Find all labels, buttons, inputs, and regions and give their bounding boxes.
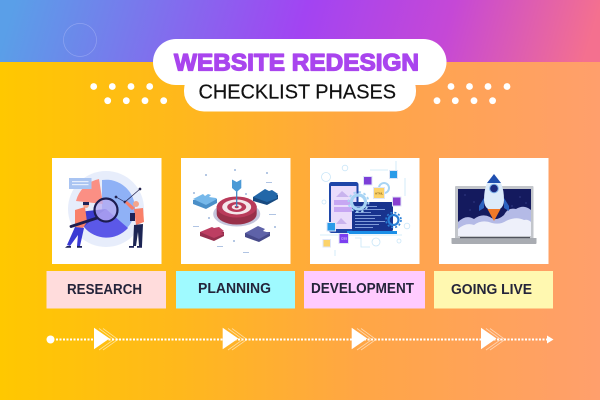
label: going live [434, 271, 553, 308]
target [213, 196, 260, 226]
title block [153, 39, 446, 112]
magnifying glass [71, 198, 118, 226]
label: research [46, 271, 166, 308]
laptop [347, 202, 397, 234]
person left [65, 202, 89, 248]
puzzle piece: red [200, 227, 224, 241]
arrow marker 4 [481, 328, 505, 350]
arrow marker 1 [94, 328, 118, 350]
rocket [479, 174, 509, 221]
line chart [115, 188, 141, 203]
note card [69, 178, 92, 189]
card: going live illustration [439, 158, 548, 264]
label: planning: PLANNING [198, 281, 271, 297]
laptop [452, 186, 536, 244]
arrow marker 2 [223, 328, 247, 350]
sticky notes [323, 170, 401, 247]
label: research: RESEARCH [67, 282, 142, 298]
phone [329, 182, 358, 233]
card: development illustration [310, 158, 420, 264]
title: website redesign: WEBSITE REDESIGN [174, 50, 419, 76]
puzzle piece: slate [245, 226, 270, 242]
clouds [458, 207, 531, 236]
label: development: DEVELOPMENT [311, 281, 414, 297]
timeline start dot [46, 336, 54, 344]
timeline [46, 328, 554, 350]
label: going live: GOING LIVE [451, 282, 532, 298]
dots: left [90, 83, 167, 104]
sticky notes: HTML [375, 192, 383, 196]
background tech lines [320, 161, 410, 256]
label: development [304, 271, 425, 308]
pie chart [76, 179, 135, 238]
puzzle piece: light blue [193, 194, 217, 209]
timeline end arrow [547, 336, 554, 344]
arrow in target [232, 180, 241, 207]
arrow marker 3 [352, 328, 376, 350]
person right [125, 201, 144, 248]
subtitle: checklist phases: CHECKLIST PHASES [198, 82, 396, 104]
scatter dots [193, 169, 276, 253]
puzzle piece: dark blue [253, 189, 278, 205]
sticky notes: CSS [341, 236, 347, 240]
dots: right [434, 83, 510, 104]
card: research illustration [52, 158, 162, 264]
top gradient band [0, 0, 600, 62]
decorative circle [64, 24, 96, 56]
gears [348, 183, 401, 228]
card: planning illustration [181, 158, 290, 264]
label: planning [176, 271, 295, 308]
